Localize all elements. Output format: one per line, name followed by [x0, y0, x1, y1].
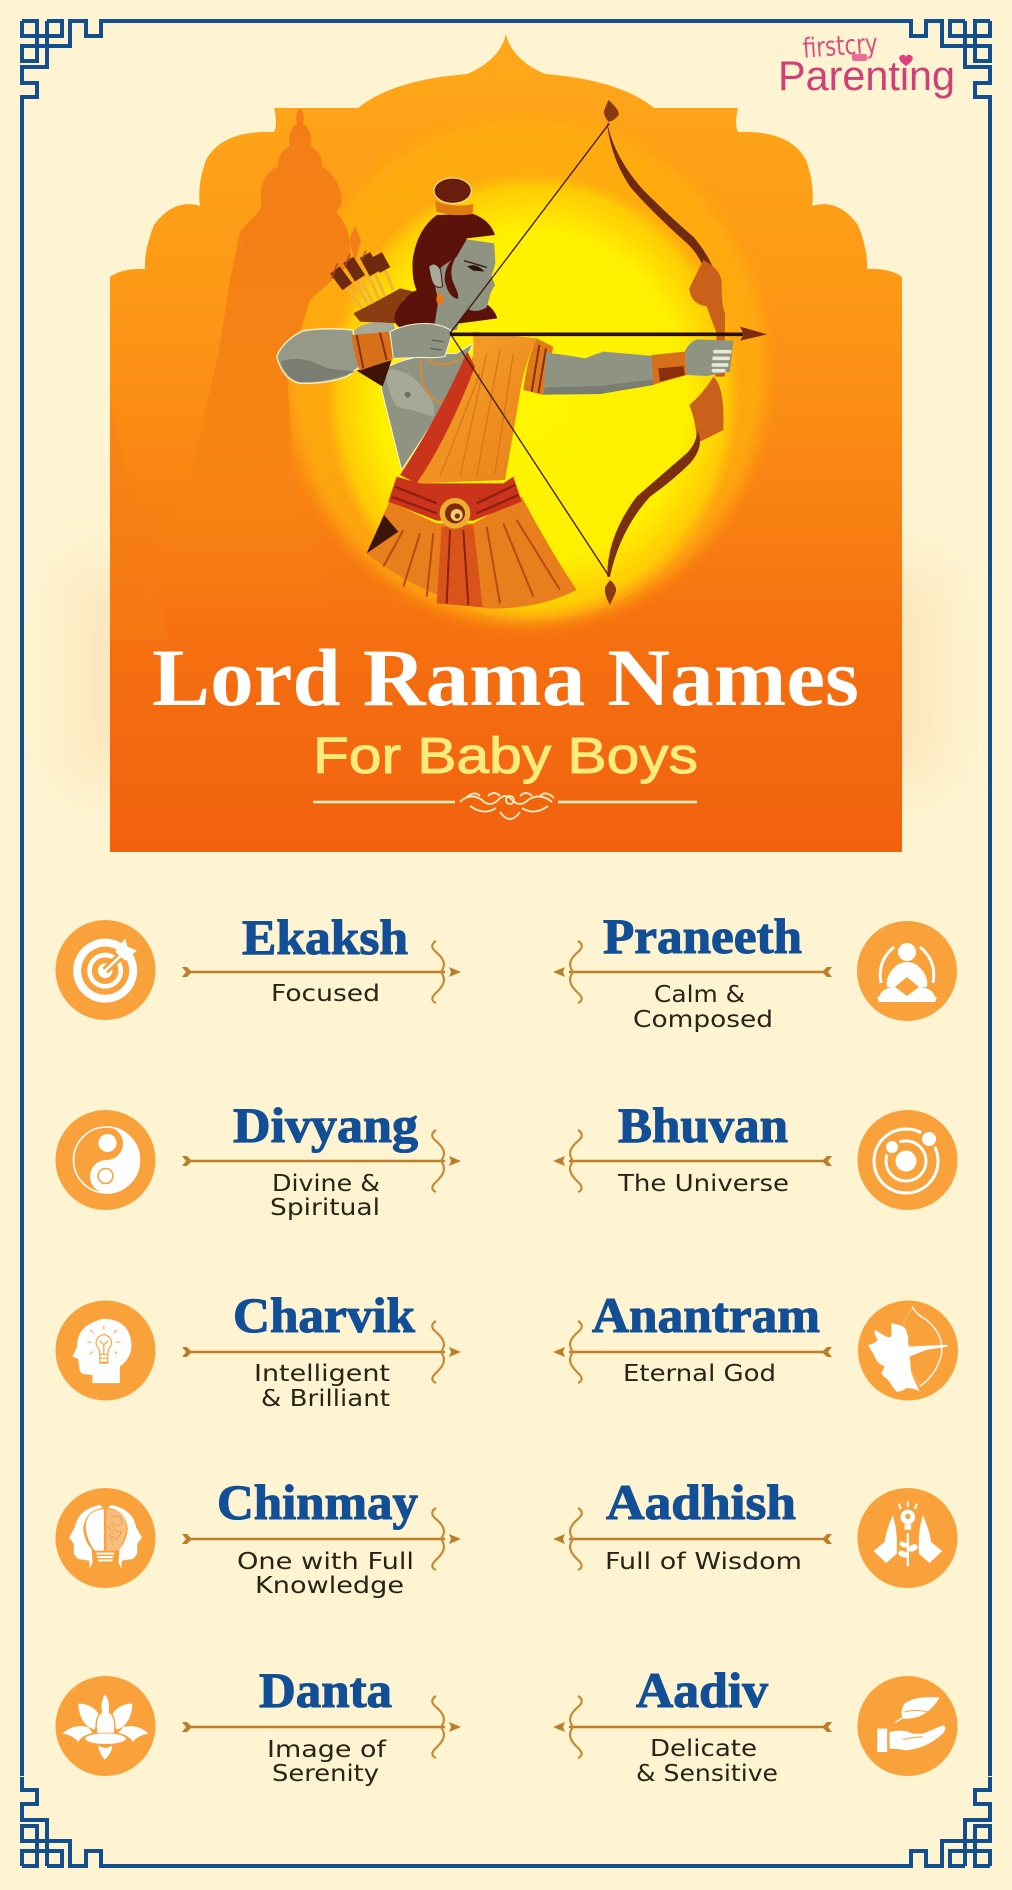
name: Charvik	[233, 1287, 415, 1343]
arrow divider	[553, 941, 832, 1003]
entry: Chinmay	[56, 1474, 461, 1599]
earring	[436, 293, 444, 305]
meaning	[636, 1734, 778, 1787]
meaning	[267, 1735, 387, 1787]
meaning	[633, 980, 773, 1033]
name: Bhuvan	[618, 1097, 788, 1153]
name: Praneeth	[603, 908, 802, 964]
meaning: Focused	[271, 979, 380, 1007]
meaning: Calm &	[654, 980, 745, 1008]
quiver	[332, 251, 414, 323]
entry: Danta	[56, 1662, 461, 1787]
arrow divider	[182, 1130, 461, 1192]
meaning: Delicate	[650, 1734, 757, 1762]
dhoti dark fold	[367, 515, 398, 553]
name: Danta	[259, 1662, 392, 1718]
meaning: & Brilliant	[261, 1384, 390, 1412]
meaning: The Universe	[617, 1169, 789, 1197]
icon: hands with bulb plant	[858, 1488, 958, 1588]
entry: Praneeth	[553, 908, 957, 1033]
bow lower cloth	[689, 377, 724, 443]
name: Ekaksh	[242, 909, 408, 965]
hair band	[435, 201, 473, 215]
title: Lord Rama Names	[152, 632, 859, 723]
shawl	[417, 332, 537, 483]
sun	[327, 173, 739, 621]
meaning: & Sensitive	[636, 1759, 778, 1787]
entry: Ekaksh	[56, 909, 461, 1020]
icon: head with bulb	[56, 1300, 156, 1400]
chest highlight	[385, 370, 434, 417]
meaning: Knowledge	[255, 1571, 404, 1599]
icon: target	[56, 920, 156, 1020]
meaning: Composed	[633, 1005, 773, 1033]
navel mark	[405, 392, 411, 398]
small spires	[349, 226, 361, 260]
eye and brow	[464, 261, 487, 271]
dhoti	[367, 497, 577, 608]
entry: Aadhish	[553, 1474, 958, 1588]
back arm	[277, 329, 360, 383]
arrow divider	[553, 1130, 832, 1192]
back arm shade	[281, 359, 355, 382]
name: Aadiv	[636, 1662, 768, 1718]
logo: FirstCry Parenting	[778, 28, 955, 99]
meaning: Spiritual	[270, 1193, 380, 1221]
knuckle lines	[430, 340, 443, 350]
meaning: Intelligent	[254, 1359, 390, 1387]
arrow divider	[553, 1696, 832, 1758]
subtitle: For Baby Boys	[313, 727, 698, 784]
arrow	[450, 329, 743, 340]
icon: faces with bulb	[56, 1488, 156, 1588]
torso	[382, 343, 473, 470]
logo: FirstCry Parenting: Parenting	[778, 52, 955, 99]
illustration: Lord Rama with bow	[277, 100, 767, 608]
meaning: Eternal God	[623, 1359, 776, 1387]
arrow divider	[182, 1321, 461, 1383]
temple silhouette	[208, 108, 352, 441]
panel: hero banner	[110, 34, 902, 852]
name: Aadhish	[606, 1474, 796, 1530]
shadow under arm	[357, 360, 392, 387]
meaning	[270, 1169, 380, 1221]
logo: FirstCry Parenting: firstcry	[802, 28, 879, 65]
icon: lotus figure	[56, 1676, 156, 1776]
hair bun	[434, 178, 471, 203]
centre drape	[437, 525, 483, 607]
entry: Charvik	[56, 1287, 461, 1412]
bow upper limb	[607, 120, 715, 277]
icon: meditation	[857, 921, 957, 1021]
distant temple	[110, 400, 168, 640]
front arm	[543, 352, 653, 395]
arrow divider	[553, 1508, 832, 1570]
arrow divider	[553, 1321, 832, 1383]
forearm and fist	[390, 324, 453, 358]
ornamental divider	[313, 793, 697, 819]
icon: hand with leaf	[858, 1676, 958, 1776]
icon: orbits	[858, 1110, 958, 1210]
meaning: Full of Wisdom	[605, 1547, 802, 1575]
name: Chinmay	[217, 1474, 418, 1530]
entry: Bhuvan	[553, 1097, 958, 1210]
bow grip cloth	[689, 260, 725, 377]
meaning: Divine &	[272, 1169, 380, 1197]
banner soft glow	[70, 570, 942, 780]
red sash	[400, 352, 475, 483]
shawl folds	[440, 350, 513, 477]
icon: yin yang	[56, 1110, 156, 1210]
outer sun halo	[287, 119, 767, 625]
belt buckle	[440, 498, 470, 529]
meaning	[254, 1359, 390, 1412]
arrow divider	[182, 941, 461, 1003]
entry: Aadiv	[553, 1662, 958, 1787]
icon: archer silhouette	[858, 1300, 958, 1400]
face and neck	[433, 239, 495, 333]
entry: Divyang	[56, 1097, 461, 1221]
armlet	[352, 332, 395, 371]
dhoti folds	[383, 520, 560, 603]
sideburn	[445, 255, 458, 299]
gripping hand	[685, 339, 733, 376]
belt	[388, 477, 522, 521]
sleeve	[523, 338, 553, 395]
meaning: Serenity	[272, 1759, 379, 1787]
meaning	[237, 1547, 414, 1599]
arrow divider	[182, 1508, 461, 1570]
hair	[394, 214, 497, 330]
bow tips	[604, 100, 619, 605]
name: Anantram	[592, 1287, 820, 1343]
wrist band	[652, 352, 687, 385]
name: Divyang	[233, 1097, 418, 1153]
ear	[429, 264, 443, 287]
bow string	[450, 123, 609, 577]
bow lower limb	[607, 430, 700, 577]
shoulder	[353, 322, 400, 343]
necklace	[421, 357, 473, 404]
entry: Anantram	[553, 1287, 958, 1400]
arrow divider	[182, 1696, 461, 1758]
meaning: One with Full	[237, 1547, 414, 1575]
meaning: Image of	[267, 1735, 387, 1763]
